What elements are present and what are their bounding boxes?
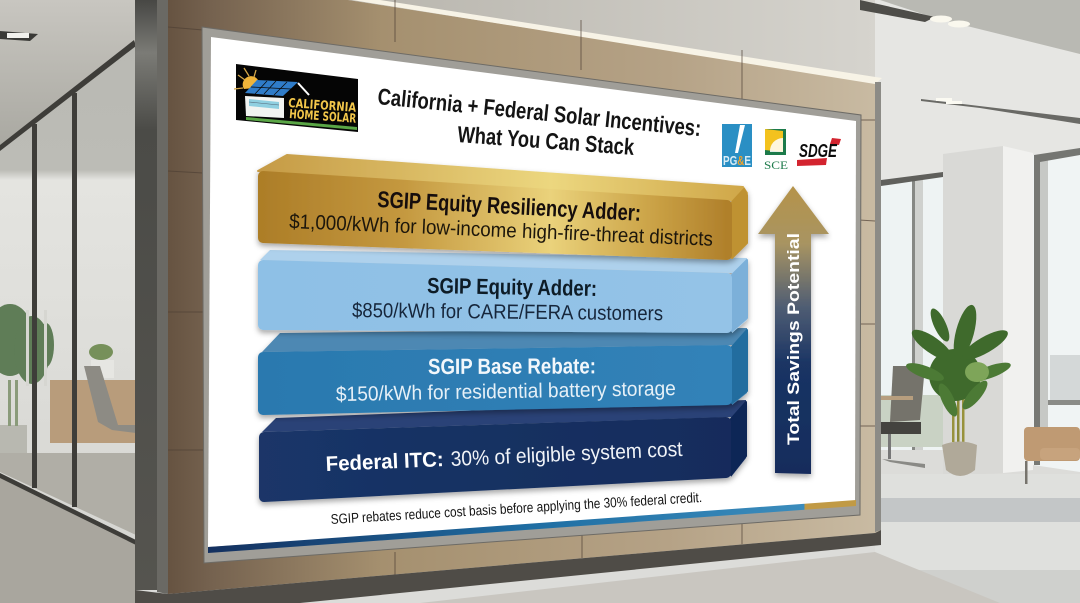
ceiling above wood <box>348 0 880 82</box>
solar roof <box>245 80 309 96</box>
footnote: SGIP rebates reduce cost basis before applying the 30% federal credit. <box>330 489 703 527</box>
arrow: total savings potential: Total Savings Potential <box>784 233 803 445</box>
ceiling lights <box>921 16 1080 124</box>
right windows <box>881 148 1080 472</box>
layer: SGIP Equity Resiliency Adder <box>258 155 747 258</box>
right chair <box>881 366 925 468</box>
logo: PG&E <box>722 124 752 168</box>
arrow: total savings potential <box>758 186 829 474</box>
white column <box>943 146 1033 476</box>
layer: Federal ITC: 30% of eligible system cost <box>450 438 683 471</box>
sun <box>234 68 258 89</box>
wood joints <box>168 0 875 575</box>
house <box>245 96 284 118</box>
left small plant <box>89 344 114 378</box>
left chair <box>84 366 136 470</box>
layer: SGIP Equity Resiliency Adder: $1,000/kWh for low-income high-fire-threat districts <box>289 210 713 251</box>
layer: SGIP Equity Adder: SGIP Equity Adder: <box>427 273 597 301</box>
layer: SGIP Equity Adder: $850/kWh for CARE/FERA customers <box>352 299 663 325</box>
logo: PG&E: PG&E <box>723 153 751 168</box>
glass mullions <box>0 40 136 545</box>
left floor <box>0 475 136 603</box>
signboard <box>202 27 861 563</box>
left glass wall <box>0 43 136 543</box>
sofa <box>1024 427 1080 484</box>
layer: SGIP Base Rebate: SGIP Base Rebate: <box>428 353 596 379</box>
sign frame <box>202 27 861 563</box>
layer: SGIP Base Rebate: $150/kWh for residential battery storage <box>336 377 676 406</box>
lawn line <box>246 117 357 130</box>
logo: SCE: SCE <box>764 158 788 172</box>
logo: California Home Solar: HOME SOLAR <box>289 106 357 126</box>
logo: California Home Solar <box>234 64 358 132</box>
left credenza <box>50 380 136 443</box>
title: California + Federal Solar Incentives: <box>377 83 702 141</box>
left ceiling <box>0 0 136 148</box>
perforated ceiling <box>880 0 1080 54</box>
title: What You Can Stack <box>457 121 635 160</box>
floor beneath wood <box>135 530 881 603</box>
glass door handles <box>26 310 47 386</box>
logo: SDGE <box>797 138 841 166</box>
sign face <box>208 37 856 547</box>
logo: SCE <box>764 129 788 172</box>
wood wall <box>168 0 882 594</box>
layer: SGIP Equity Adder <box>260 250 747 333</box>
layer: SGIP Equity Resiliency Adder: SGIP Equity Resiliency Adder: <box>377 186 642 226</box>
right plant <box>904 303 1013 476</box>
logo: SDGE: SDGE <box>799 141 838 161</box>
layer: Federal ITC <box>262 400 746 497</box>
left light fixture <box>0 31 38 41</box>
LED edge <box>352 0 882 84</box>
layer: SGIP Base Rebate <box>262 328 747 410</box>
bottom color strip <box>208 500 856 553</box>
layer: Federal ITC: Federal ITC: <box>325 448 444 476</box>
left floor inside glass <box>0 453 136 535</box>
left plant <box>0 304 54 455</box>
right floor <box>875 474 1080 603</box>
right ceiling and wall <box>875 0 1080 180</box>
logo text: CALIFORNIA <box>288 95 357 115</box>
dark column <box>135 0 168 594</box>
